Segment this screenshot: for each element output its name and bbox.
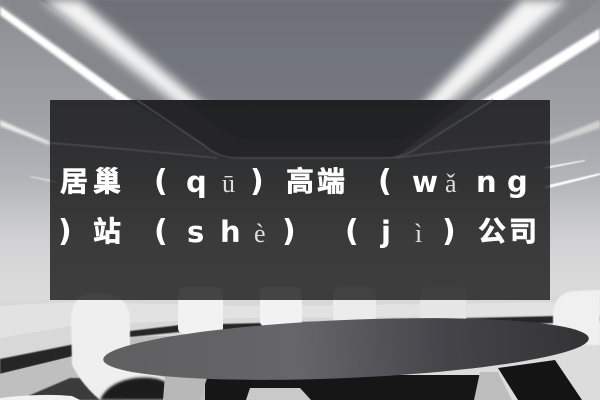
title line 1: n: [476, 165, 497, 199]
white chair right: [553, 290, 600, 345]
title line 1: 巢: [93, 160, 121, 200]
title line 1: w: [412, 165, 438, 199]
title line 2: h: [220, 215, 241, 249]
title text: [58, 160, 537, 250]
title line 2: s: [187, 215, 204, 249]
title line 1: (: [378, 164, 392, 199]
title line 2: 公: [478, 210, 506, 250]
dark skirting: [0, 315, 600, 374]
title line 1: [60, 160, 528, 200]
dark text panel: [50, 100, 550, 300]
title line 2: (: [345, 214, 359, 249]
title line 2: ): [58, 214, 72, 249]
oval table top: [102, 309, 590, 389]
title line 2: (: [154, 214, 168, 249]
panel ceiling contours: [50, 100, 550, 158]
title line 1: ): [250, 164, 264, 199]
back wall: [0, 296, 600, 362]
title line 1: ū: [222, 169, 235, 198]
ceiling centre plane: [40, 0, 560, 140]
wall light streaks: [0, 120, 50, 145]
title line 2: j: [380, 215, 391, 249]
title line 1: g: [507, 165, 528, 199]
title line 2: 站: [93, 210, 121, 250]
title line 2: [58, 210, 537, 250]
title line 2: ì: [415, 219, 422, 248]
title line 2: è: [254, 219, 266, 248]
title line 1: ǎ: [445, 169, 457, 198]
title line 1: 高: [286, 160, 314, 200]
table legs and dark underside: [205, 375, 490, 400]
title line 1: 端: [317, 160, 345, 200]
ceiling outer band: [0, 0, 600, 158]
title line 1: (: [154, 164, 168, 199]
title line 2: 司: [509, 210, 537, 250]
title line 2: ): [282, 214, 296, 249]
title line 2: ): [442, 214, 456, 249]
ceiling light glows: [0, 0, 600, 100]
white chairs behind the table: [178, 287, 223, 334]
title line 1: q: [186, 165, 207, 199]
floor: [0, 334, 240, 400]
title line 1: 居: [60, 160, 88, 200]
white chair left: [71, 293, 170, 400]
